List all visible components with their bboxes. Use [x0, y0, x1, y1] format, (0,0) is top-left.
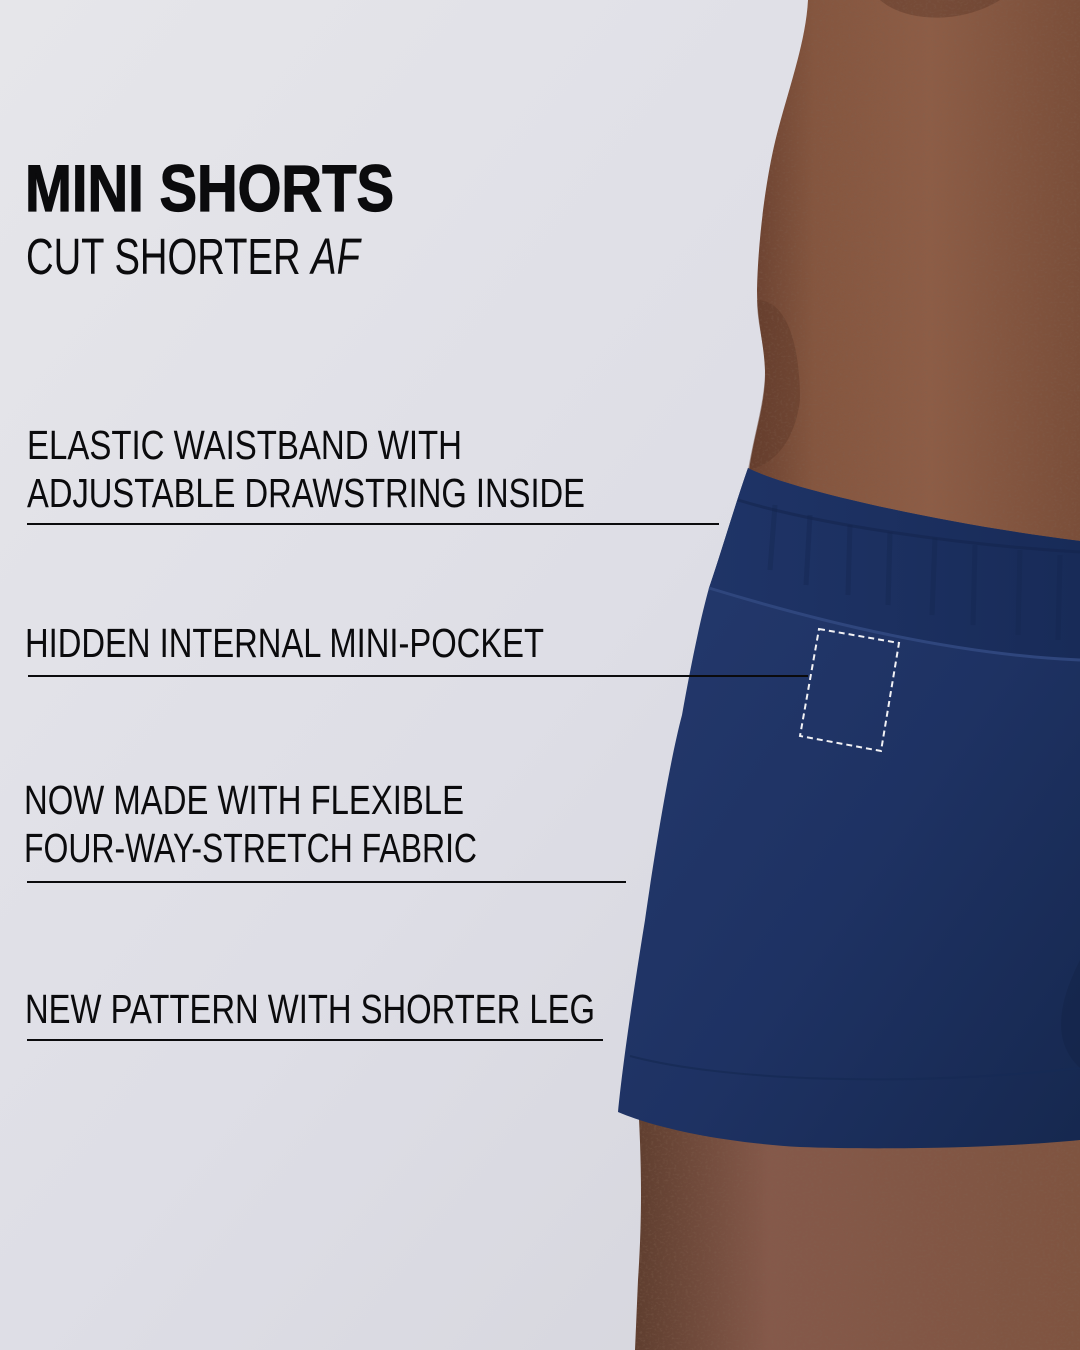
callout: stretch fabric: NOW MADE WITH FLEXIBLE	[24, 777, 464, 823]
icon: dashed pocket outline	[800, 629, 899, 751]
thigh	[635, 1100, 1080, 1350]
subtitle: CUT SHORTER AF	[26, 228, 362, 285]
waistband	[709, 468, 1080, 660]
callout: stretch fabric: FOUR-WAY-STRETCH FABRIC	[24, 825, 477, 871]
title: MINI SHORTS	[25, 151, 394, 225]
callout: elastic waistband: ADJUSTABLE DRAWSTRING INSIDE	[27, 470, 585, 516]
callout: stretch fabric	[24, 777, 626, 883]
callout: elastic waistband	[27, 422, 719, 525]
leg texture	[636, 1126, 682, 1350]
torso shading	[748, 0, 1000, 470]
torso	[748, 0, 1080, 600]
callout: elastic waistband: ELASTIC WAISTBAND WITH	[27, 422, 462, 468]
waistband seam	[709, 588, 1080, 660]
waistband gathers	[770, 505, 1060, 640]
photo: model wearing navy mini shorts	[618, 0, 1080, 1350]
callout: shorter leg: NEW PATTERN WITH SHORTER LEG	[25, 986, 595, 1032]
shorts body	[618, 468, 1080, 1148]
callout: hidden pocket: HIDDEN INTERNAL MINI-POCKET	[25, 620, 544, 666]
shorts fold shadow	[1061, 960, 1080, 1068]
skin texture	[752, 70, 796, 468]
hem stitching	[630, 1056, 1080, 1079]
